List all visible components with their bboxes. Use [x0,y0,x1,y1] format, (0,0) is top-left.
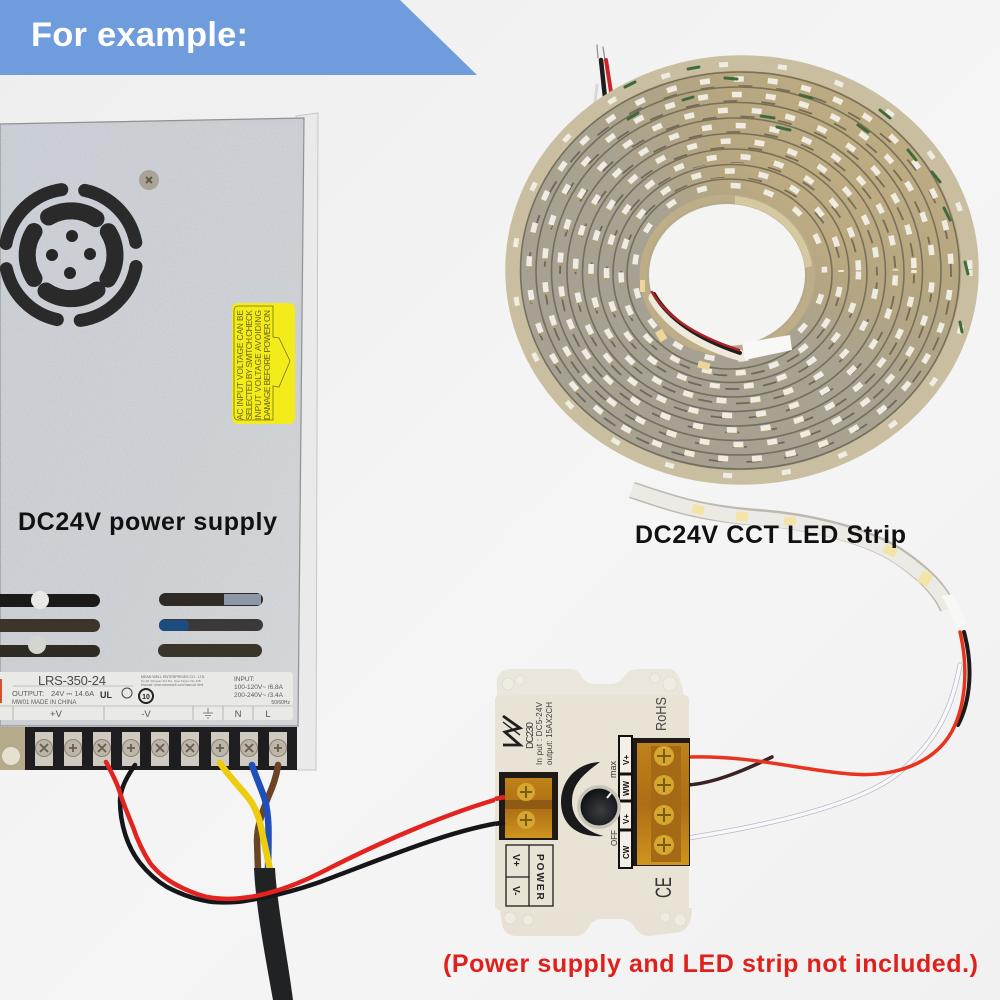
model text [525,701,554,765]
DC wires: power supply to controller [106,762,505,902]
rating label: 50/60Hz [271,700,290,706]
LEDs on tail [691,504,933,587]
rating label: MW01 MADE IN CHINA [12,700,76,706]
dimmer knob with scale arc: max [608,760,618,778]
channel label strip: V+ [622,814,631,824]
rating label: UL [100,690,112,700]
model text: output: 15AX2CH [545,702,554,765]
icon: fan grille [6,190,136,320]
icon: strip lead wires at coil top [590,45,611,145]
rating label: 24V ⎓ 14.6A [51,689,94,698]
channel label strip [619,736,632,868]
model text: In put : DC5-24V [535,701,544,765]
channel label strip: V+ [622,755,631,765]
LED strip coil [506,56,978,484]
ventilation slots [0,591,263,657]
mounting holes [502,673,686,926]
output wires: controller to strip [688,632,970,838]
dimmer controller [495,669,692,936]
rating label: Manual: www.meanwell.com/manual.html [141,683,203,687]
warning label: SELECTED BY SWITCH.CHECK [244,310,254,420]
icon: case screw [139,170,159,190]
rating label: N [235,709,242,720]
rating label: No.28, Wuquan 3rd Rd., New Taipei City 248 [141,679,201,683]
inner strip lead with sleeve [652,292,792,360]
inner tape and hole [643,196,812,352]
heading: For example: [31,16,248,54]
power label box: POWER [534,854,545,902]
warning label: DAMAGE BEFORE POWER ON [262,310,272,420]
rating label: MEAN WELL ENTERPRISES CO., LTD. [141,675,205,679]
power label box [506,845,553,906]
note: not included: (Power supply and LED strip not included.) [443,950,978,978]
LED strip tail [632,490,967,629]
rating label: LRS-350-24 [38,673,106,688]
channel label strip: CW [622,845,631,859]
text: CE mark: CE [651,877,676,898]
channel label strip: WW [622,780,631,796]
warning label: AC INPUT VOLTAGE CAN BE [235,310,245,420]
adhesive tape marks [625,67,968,332]
warning label: INPUT VOLTAGE AVOIDING [253,310,263,420]
label: LED strip: DC24V CCT LED Strip [635,521,906,549]
power supply unit [0,113,318,770]
warm LEDs near hole [640,280,711,370]
brand logo [503,716,520,745]
dimmer knob with scale arc [561,760,621,846]
terminal block [0,727,297,770]
header banner [0,0,477,75]
input terminal [495,772,558,840]
rating label: 200-240V~ /3.4A [234,692,284,699]
mains cable [220,763,293,1000]
rating label: +V [50,709,63,720]
dimmer knob with scale arc: OFF [610,830,619,846]
rating label: OUTPUT: [12,689,44,698]
text: RoHS: RoHS [653,697,670,731]
rating label: L [265,709,271,720]
label: power supply: DC24V power supply [18,508,277,536]
rating label: -V [141,709,151,720]
power label box: V+ [510,854,521,867]
side rail [296,113,318,770]
warning label [232,303,295,424]
power label box: V- [510,886,521,895]
rating label [0,672,293,720]
rating label: 10 [142,694,150,701]
output terminal [633,738,690,866]
rating label: 100-120V~ /6.8A [234,684,284,691]
model text: DC230 [525,722,536,749]
rating label: INPUT: [234,676,255,683]
